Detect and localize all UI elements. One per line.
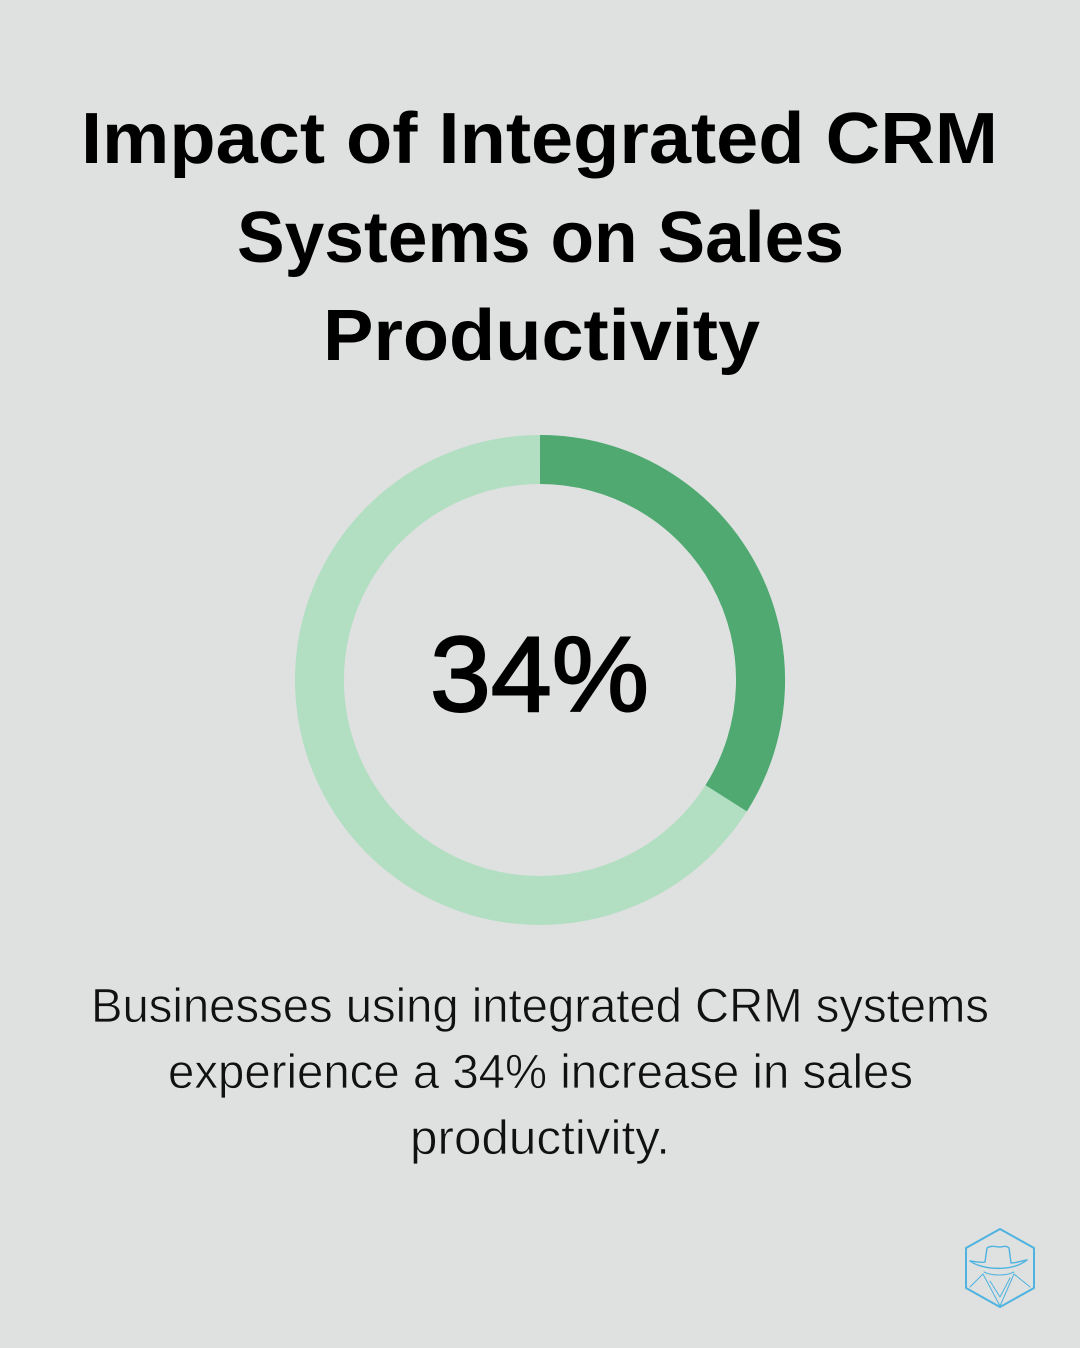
description text: [91, 980, 989, 1165]
title: Productivity: [323, 296, 760, 376]
donut chart: 34%: [320, 459, 761, 900]
title: [81, 99, 998, 376]
description text: productivity.: [410, 1112, 670, 1165]
icon: hexagon logo with hat and spy: [966, 1229, 1034, 1307]
title: Systems on Sales: [237, 198, 844, 278]
donut value: 34%: [430, 614, 649, 734]
title: Impact of Integrated CRM: [81, 99, 998, 179]
description text: Businesses using integrated CRM systems: [91, 980, 989, 1033]
description text: experience a 34% increase in sales: [168, 1046, 913, 1099]
